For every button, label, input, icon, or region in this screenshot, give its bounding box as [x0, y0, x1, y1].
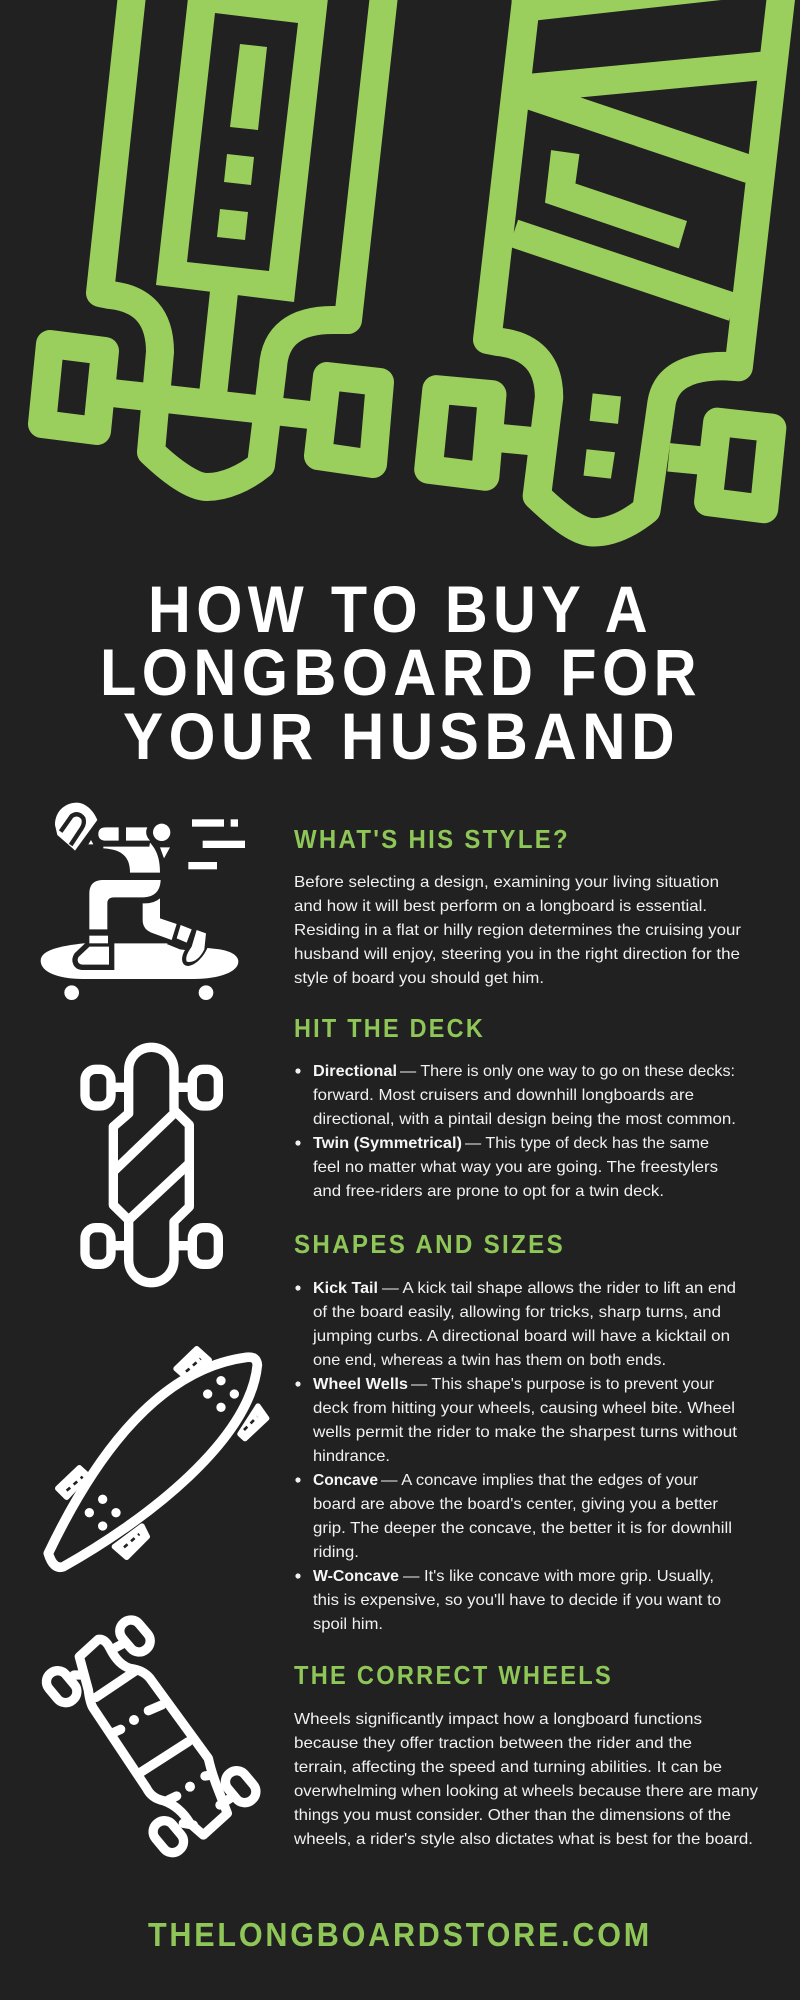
bullet: w-concave: this is expensive, so you'll have to decide if you want to: [313, 1592, 721, 1609]
icon: angled longboard with wheels: [42, 1616, 260, 1857]
section: what's his style: [294, 824, 742, 987]
bullet: twin symmetrical: and free-riders are prone to opt for a twin deck.: [313, 1183, 664, 1200]
paragraph: wheels: because they offer traction between the rider and the: [294, 1735, 692, 1752]
bullet: wheel wells: Wheel Wells: [313, 1376, 408, 1393]
bullet: concave: board are above the board's center, giving you a better: [313, 1496, 719, 1513]
bullet: wheel wells: wells permit the rider to make the sharpest turns without: [312, 1424, 738, 1441]
paragraph: wheels: Wheels significantly impact how a longboard functions: [294, 1711, 702, 1728]
bullet: twin symmetrical: feel no matter what way you are going. The freestylers: [313, 1159, 718, 1176]
paragraph: style: husband will enjoy, steering you in the right direction for the: [294, 946, 740, 963]
footer: website: THELONGBOARDSTORE.COM: [148, 1916, 652, 1953]
bullet: concave: riding.: [313, 1544, 359, 1561]
bullet: w-concave: [295, 1568, 721, 1633]
hero illustration: two longboards: [42, 0, 781, 532]
section: the correct wheels: [293, 1660, 758, 1848]
icon: left green longboard: [42, 0, 384, 487]
bullet: twin symmetrical: [295, 1135, 718, 1200]
title: HOW TO BUY A: [148, 572, 653, 646]
paragraph: style: Residing in a flat or hilly region determines the cruising your: [294, 922, 742, 939]
bullet: concave: Concave: [313, 1472, 378, 1489]
bullet: w-concave: — It's like concave with more grip. Usually,: [403, 1568, 714, 1585]
paragraph: wheels: things you must consider. Other than the dimensions of the: [294, 1807, 731, 1824]
bullet: kick tail: one end, whereas a twin has them on both ends.: [313, 1352, 666, 1369]
bullet: kick tail: — A kick tail shape allows the rider to lift an end: [382, 1280, 736, 1297]
bullet: concave: grip. The deeper the concave, the better it is for downhill: [313, 1520, 732, 1537]
heading: what's his style: WHAT'S HIS STYLE?: [294, 824, 570, 854]
bullet: directional: [295, 1063, 736, 1128]
paragraph: wheels: terrain, affecting the speed and turning abilities. It can be: [294, 1759, 722, 1776]
bullet: concave: — A concave implies that the edges of your: [381, 1472, 699, 1489]
bullet: kick tail: Kick Tail: [313, 1280, 378, 1297]
bullet: twin symmetrical: — This type of deck has the same: [465, 1135, 709, 1152]
bullet: directional: Directional: [313, 1063, 397, 1080]
heading: hit the deck: HIT THE DECK: [294, 1013, 485, 1043]
bullet: concave: [295, 1472, 732, 1561]
title: YOUR HUSBAND: [123, 699, 680, 773]
bullet: kick tail: of the board easily, allowing for tricks, sharp turns, and: [313, 1304, 721, 1321]
bullet: w-concave: W-Concave: [313, 1568, 399, 1585]
paragraph: style: Before selecting a design, examining your living situation: [294, 874, 719, 891]
bullet: wheel wells: — This shape's purpose is to prevent your: [411, 1376, 715, 1393]
paragraph: wheels: wheels, a rider's style also dictates what is best for the board.: [293, 1831, 753, 1848]
section: shapes and sizes: [294, 1229, 738, 1633]
paragraph: wheels: overwhelming when looking at wheels because there are many: [294, 1783, 758, 1800]
bullet: w-concave: spoil him.: [313, 1616, 383, 1633]
bullet: directional: forward. Most cruisers and downhill longboards are: [313, 1087, 694, 1104]
paragraph: style: and how it will best perform on a longboard is essential.: [294, 898, 707, 915]
icon: pintail longboard: [48, 1349, 267, 1567]
icon: right green longboard: [428, 0, 781, 532]
title: LONGBOARD FOR: [100, 635, 702, 709]
bullet: directional: directional, with a pintail design being the most common.: [313, 1111, 736, 1128]
title: [100, 572, 702, 773]
icon: top-view longboard with diagonal stripes: [85, 1047, 218, 1283]
heading: shapes and sizes: SHAPES AND SIZES: [294, 1229, 565, 1259]
section: hit the deck: [294, 1013, 736, 1200]
bullet: twin symmetrical: Twin (Symmetrical): [313, 1135, 462, 1152]
bullet: wheel wells: hindrance.: [313, 1448, 390, 1465]
paragraph: style: style of board you should get him.: [294, 970, 544, 987]
bullet: kick tail: jumping curbs. A directional board will have a kicktail on: [312, 1328, 730, 1345]
bullet: wheel wells: deck from hitting your wheels, causing wheel bite. Wheel: [313, 1400, 735, 1417]
icon: skater riding a board: [41, 803, 245, 1000]
bullet: wheel wells: [295, 1376, 738, 1465]
bullet: kick tail: [295, 1280, 736, 1369]
bullet: directional: — There is only one way to go on these decks:: [400, 1063, 735, 1080]
paragraph: style: [294, 874, 742, 987]
heading: the correct wheels: THE CORRECT WHEELS: [294, 1660, 613, 1690]
paragraph: wheels: [293, 1711, 758, 1848]
